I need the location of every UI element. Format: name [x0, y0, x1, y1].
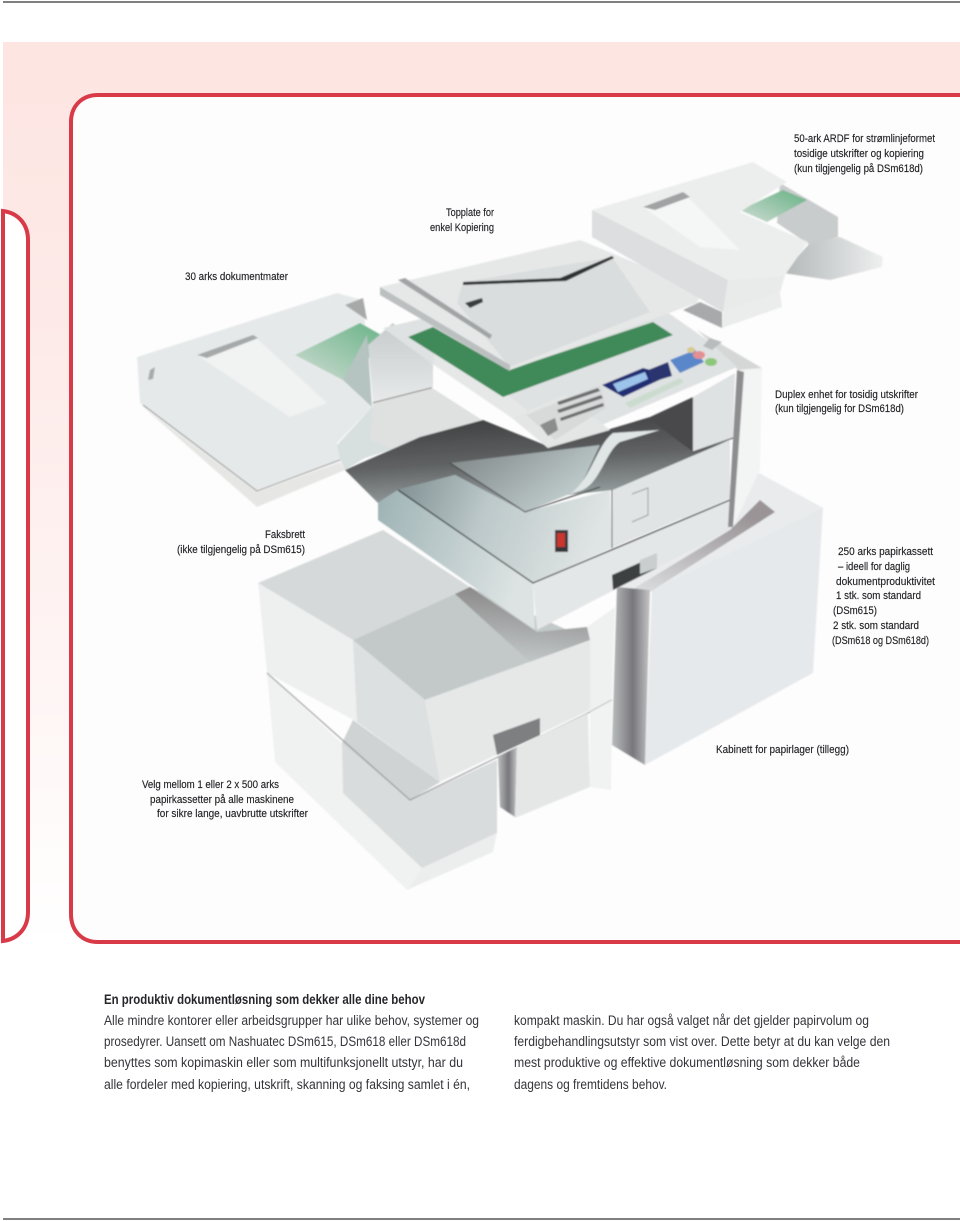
label: 500-sheet cassettes: papirkassetter på alle maskinene — [150, 794, 294, 806]
label: ARDF: 50-ark ARDF for strømlinjeformet — [794, 133, 935, 145]
illustration: modular copier system — [137, 162, 883, 890]
right paper cabinet — [587, 472, 823, 765]
label: 500-sheet cassettes — [142, 779, 308, 820]
label: paper cabinet: Kabinett for papirlager (tillegg) — [716, 744, 849, 756]
label: 250-sheet cassette: 2 stk. som standard — [833, 620, 919, 632]
body text: left column: Alle mindre kontorer eller arbeidsgrupper har ulike behov, systemer og — [104, 1013, 479, 1028]
label: 250-sheet cassette: 1 stk. som standard — [836, 590, 921, 602]
body text: right column: ferdigbehandlingsutstyr som vist over. Dette betyr at du kan velge den — [514, 1034, 890, 1049]
label: duplex unit: (kun tilgjengelig for DSm618d) — [775, 403, 904, 415]
top rule — [3, 1, 960, 3]
tall side panel — [650, 330, 762, 527]
fax tray — [137, 293, 390, 507]
scanner rear section and side tray — [337, 323, 482, 470]
label: fax tray — [177, 529, 305, 556]
power switch light — [557, 533, 565, 547]
body text: left column: prosedyrer. Uansett om Nashuatec DSm615, DSm618 eller DSm618d — [104, 1034, 466, 1049]
left paper cabinet with drawers — [258, 530, 612, 890]
body text: left column: alle fordeler med kopiering, utskrift, skanning og faksing samlet i én, — [104, 1077, 470, 1092]
50-sheet ARDF — [592, 162, 883, 328]
label: fax tray: (ikke tilgjengelig på DSm615) — [177, 544, 305, 556]
label: 250-sheet cassette: (DSm618 og DSm618d) — [832, 635, 929, 647]
label: 500-sheet cassettes: for sikre lange, uavbrutte utskrifter — [157, 808, 308, 820]
label: 500-sheet cassettes: Velg mellom 1 eller 2 x 500 arks — [142, 779, 279, 791]
main red-outlined panel — [71, 95, 960, 942]
body text: right column: mest produktive og effektive dokumentløsning som dekker både — [514, 1055, 860, 1070]
label: 250-sheet cassette: (DSm615) — [833, 605, 877, 617]
label: top plate: enkel Kopiering — [430, 222, 494, 234]
bottom rule — [3, 1218, 960, 1220]
copier base — [345, 417, 730, 630]
scanner glass — [408, 322, 673, 397]
left red-outlined panel — [3, 211, 28, 941]
label: ARDF: tosidige utskrifter og kopiering — [794, 148, 924, 160]
pink background band — [3, 42, 960, 942]
body text: left column: benyttes som kopimaskin eller som multifunksjonellt utstyr, har du — [104, 1055, 463, 1070]
scanner body — [383, 300, 737, 448]
label: top plate — [430, 207, 494, 234]
label: ARDF — [794, 133, 935, 175]
label: duplex unit — [775, 389, 918, 415]
label: duplex unit: Duplex enhet for tosidig utskrifter — [775, 389, 918, 401]
label: ARDF: (kun tilgjengelig på DSm618d) — [794, 163, 923, 175]
label: fax tray: Faksbrett — [265, 529, 305, 541]
label: 250-sheet cassette: 250 arks papirkassett — [838, 546, 933, 558]
body text: right column: kompakt maskin. Du har også valget når det gjelder papirvolum og — [514, 1013, 869, 1028]
label: top plate: Topplate for — [446, 207, 494, 219]
control panel — [526, 338, 722, 440]
body text: right column: dagens og fremtidens behov. — [514, 1077, 667, 1092]
label: 250-sheet cassette: – ideell for daglig — [838, 561, 910, 573]
label: 250-sheet cassette — [832, 546, 935, 647]
top plate lid — [380, 240, 702, 371]
label: document feeder: 30 arks dokumentmater — [185, 271, 288, 283]
heading: En produktiv dokumentløsning som dekker alle dine behov — [104, 992, 425, 1007]
body text: left column — [104, 1013, 479, 1092]
body text: right column — [514, 1013, 890, 1092]
power switch — [555, 530, 568, 552]
label: 250-sheet cassette: dokumentproduktivitet — [836, 576, 935, 588]
